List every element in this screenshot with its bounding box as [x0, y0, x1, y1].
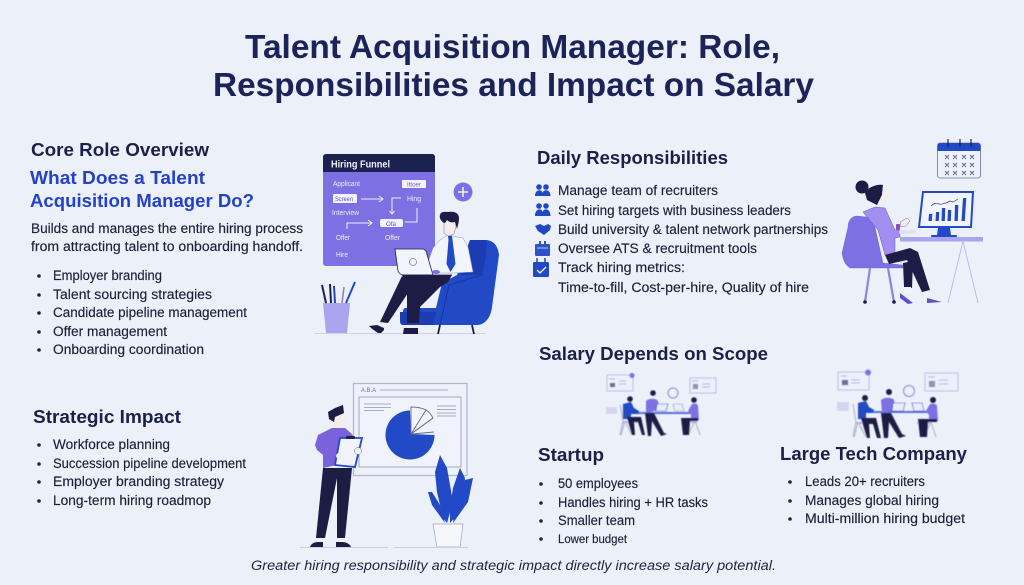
list: core duties: Employer branding — [53, 268, 162, 283]
panel: strategic impact — [33, 407, 246, 508]
heading: large tech company: Large Tech Company — [780, 444, 967, 464]
heading: core role overview: Core Role Overview — [31, 140, 210, 160]
hiring funnel board — [323, 154, 435, 266]
hiring funnel board: Hire — [336, 252, 348, 259]
list: strategic impact items: Long-term hiring roadmop — [53, 493, 211, 508]
title: Talent Acquisition Manager: Role, — [245, 28, 780, 65]
panel: core role overview — [30, 140, 303, 357]
list: large company scope: Manages global hiring — [805, 493, 939, 508]
list: core duties: Onboarding coordination — [53, 342, 204, 357]
text block: role description — [31, 221, 303, 254]
illustration: hiring funnel with man on armchair — [315, 154, 499, 334]
list: large company scope: Leads 20+ recruiters — [805, 474, 925, 489]
desk — [900, 237, 983, 303]
panel: daily responsibilities — [533, 148, 828, 295]
column: startup — [538, 373, 716, 546]
list: responsibilities with icons: Manage team of recruiters — [558, 183, 718, 198]
list: responsibilities with icons: Time-to-fill, Cost-per-hire, Quality of hire — [558, 280, 809, 295]
pie chart — [386, 407, 434, 460]
hiring funnel board: Offer — [385, 235, 401, 242]
calendar icon — [938, 139, 980, 178]
list: responsibilities with icons: Set hiring targets with business leaders — [558, 203, 791, 218]
potted plant — [428, 455, 473, 547]
hiring funnel board: Applicant — [333, 181, 360, 188]
presentation board: A.B.A — [361, 388, 376, 394]
subheading: what does a talent acquisition manager do — [30, 167, 254, 211]
list: responsibilities with icons: Build university & talent network partnerships — [558, 222, 828, 237]
list: responsibilities with icons: Track hiring metrics: — [558, 260, 685, 275]
list: startup scope: Handles hiring + HR tasks — [558, 495, 708, 510]
text block: role description: from attracting talent to onboarding handoff. — [31, 239, 303, 254]
list: responsibilities with icons: Oversee ATS & recruitment tools — [558, 241, 757, 256]
floor line — [315, 332, 485, 334]
subheading: what does a talent acquisition manager do: Acquisition Manager Do? — [30, 190, 254, 211]
heading: salary depends on scope: Salary Depends on Scope — [539, 344, 768, 364]
armchair — [400, 240, 499, 334]
title: Responsibilities and Impact on Salary — [213, 66, 815, 103]
illustration: large company team meeting — [837, 370, 958, 438]
hiring funnel board: Ittoer — [407, 182, 421, 188]
icon: checkbox — [533, 258, 549, 277]
hiring funnel board: Offer — [336, 235, 351, 242]
icon: briefcase calendar — [535, 241, 550, 256]
list: strategic impact items: Succession pipeline development — [53, 456, 246, 471]
seated woman — [856, 180, 942, 304]
icon: handshake — [535, 224, 551, 235]
list: responsibilities with icons — [533, 183, 828, 295]
icon: people — [535, 203, 550, 216]
panel: salary depends on scope — [538, 344, 967, 546]
illustration: man presenting pie chart with plant — [300, 384, 473, 548]
list: large company scope: Multi-million hiring budget — [805, 511, 965, 526]
monitor with bar chart — [919, 192, 973, 238]
list: strategic impact items — [37, 437, 246, 508]
list: startup scope — [539, 476, 708, 546]
list: core duties — [37, 268, 247, 357]
heading: strategic impact: Strategic Impact — [33, 407, 181, 427]
hiring funnel board: Hing — [407, 196, 421, 203]
pen cup — [322, 282, 355, 333]
floor line — [300, 546, 468, 548]
column: large tech company — [780, 370, 967, 526]
illustration: woman at desk with monitor and calendar — [842, 139, 983, 304]
presenter with clipboard — [310, 405, 362, 547]
illustration: startup team meeting — [606, 373, 716, 436]
chair — [842, 216, 903, 304]
list: large company scope — [788, 474, 965, 526]
title — [213, 28, 815, 103]
icon: team — [535, 184, 550, 196]
list: startup scope: Smaller team — [558, 513, 635, 528]
hiring funnel board: Interview — [332, 210, 360, 217]
list: strategic impact items: Employer branding strategy — [53, 474, 224, 489]
hiring funnel board: Screen — [335, 197, 353, 203]
hiring funnel board: Ofa — [386, 222, 397, 228]
list: startup scope: 50 employees — [558, 476, 638, 491]
icon: plus badge — [454, 182, 472, 202]
presentation board — [354, 384, 467, 476]
man with laptop — [369, 212, 473, 334]
subheading: what does a talent acquisition manager do: What Does a Talent — [30, 167, 205, 188]
list: strategic impact items: Workforce planning — [53, 437, 170, 452]
heading: startup: Startup — [538, 445, 604, 465]
list: core duties: Talent sourcing strategies — [53, 287, 212, 302]
hiring funnel board: Hiring Funnel — [331, 160, 390, 170]
list: startup scope: Lower budget — [558, 534, 628, 546]
heading: daily responsibilities: Daily Responsibilities — [537, 148, 728, 168]
text block: role description: Builds and manages the entire hiring process — [31, 221, 303, 236]
list: core duties: Candidate pipeline management — [53, 305, 247, 320]
footer takeaway: Greater hiring responsibility and strategic impact directly increase salary potential. — [251, 558, 776, 573]
list: core duties: Offer management — [53, 324, 167, 339]
